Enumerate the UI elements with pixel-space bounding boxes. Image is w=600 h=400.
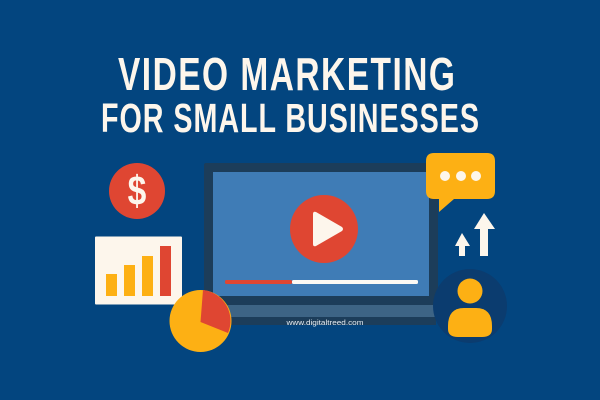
icon: dollar coin: $: [128, 169, 146, 215]
icon: growth arrows: [455, 213, 495, 256]
bar chart: [95, 236, 182, 304]
icon: dollar coin: [109, 163, 165, 219]
title: [101, 48, 479, 141]
pie chart: [170, 290, 232, 352]
icon: user: [433, 269, 507, 343]
progress bar: [225, 280, 418, 284]
title: FOR SMALL BUSINESSES: [101, 96, 479, 141]
icon: chat bubble: [426, 153, 495, 212]
title: VIDEO MARKETING: [118, 48, 455, 100]
website url: www.digitaltreed.com: [285, 318, 364, 327]
laptop: [204, 163, 438, 327]
play button: [290, 195, 358, 263]
